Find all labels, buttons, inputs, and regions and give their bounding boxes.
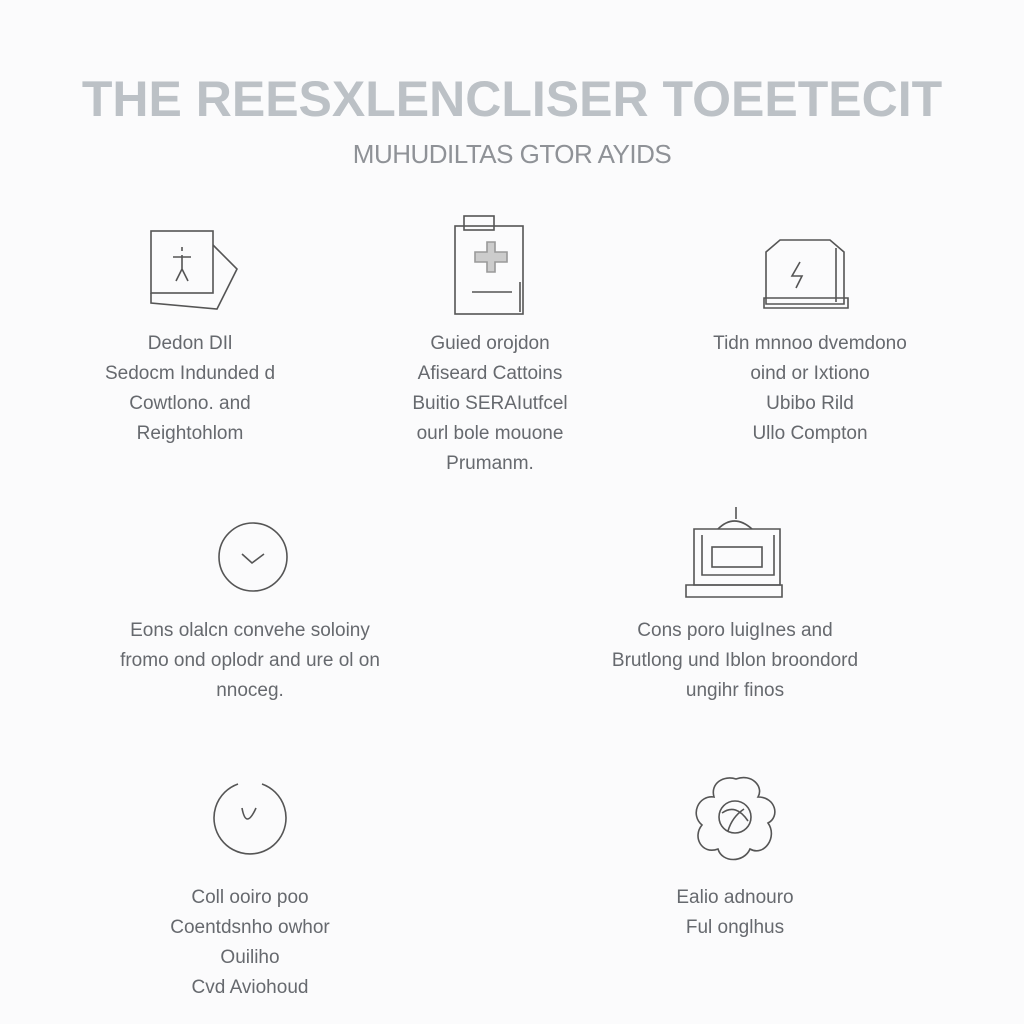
text block 2: Buitio SERAIutfcel <box>412 393 568 414</box>
text block 2: Prumanm. <box>446 453 534 474</box>
icon: power circle <box>213 783 287 855</box>
text block 5: Brutlong und Iblon broondord <box>612 650 858 671</box>
text block 7: Ful onglhus <box>686 917 784 938</box>
text block 6 <box>170 887 330 998</box>
text block 2 <box>412 333 568 474</box>
text block 2: ourl bole mouone <box>417 423 563 444</box>
text block 5: Cons poro luigInes and <box>637 620 833 641</box>
text block 1: Sedocm Indunded d <box>105 363 275 384</box>
text block 3 <box>713 333 907 444</box>
text block 2: Afiseard Cattoins <box>418 363 562 384</box>
text block 4: fromo ond oplodr and ure ol on <box>120 650 380 671</box>
text block 3: Tidn mnnoo dvemdono <box>713 333 907 354</box>
text block 3: Ubibo Rild <box>766 393 854 414</box>
subtitle: MUHUDILTAS GTOR AYIDS <box>353 139 671 169</box>
text block 4 <box>120 620 380 701</box>
text block 4: nnoceg. <box>216 680 284 701</box>
text block 5: ungihr finos <box>686 680 784 701</box>
text block 4: Eons olalcn convehe soloiny <box>130 620 370 641</box>
text block 2: Guied orojdon <box>430 333 550 354</box>
text block 6: Coll ooiro poo <box>191 887 309 908</box>
text block 1: Dedon DIl <box>148 333 232 354</box>
text block 1: Reightohlom <box>137 423 243 444</box>
icon: person card <box>150 230 238 310</box>
text block 7 <box>676 887 794 938</box>
text block 6: Cvd Aviohoud <box>192 977 308 998</box>
text block 3: Ullo Compton <box>752 423 868 444</box>
icon: building sign <box>685 507 783 598</box>
text block 1 <box>105 333 275 444</box>
title: THE REESXLENCLISER TOEETECIT <box>82 71 942 127</box>
icon: clipboard with cross <box>454 215 524 315</box>
text block 1: Cowtlono. and <box>129 393 251 414</box>
text block 7: Ealio adnouro <box>676 887 794 908</box>
text block 3: oind or Ixtiono <box>750 363 870 384</box>
text block 6: Ouiliho <box>220 947 280 968</box>
text block 5 <box>612 620 858 701</box>
icon: battery box <box>763 239 849 309</box>
icon: flower <box>695 776 776 860</box>
text block 6: Coentdsnho owhor <box>170 917 330 938</box>
icon: check circle <box>218 522 288 592</box>
